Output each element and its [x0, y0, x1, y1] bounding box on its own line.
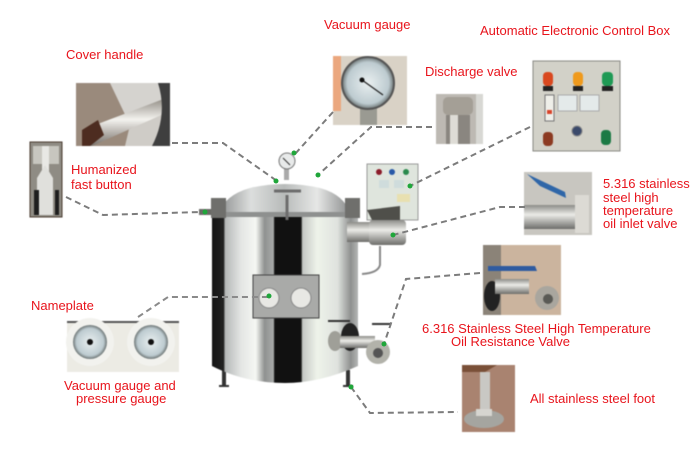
lid	[218, 184, 350, 214]
tank feet	[219, 370, 353, 387]
title: Vacuum gauge: Vacuum gauge	[324, 17, 410, 32]
label: 6.316 Stainless Steel High Temperature Oil Resistance Valve: 6.316 Stainless Steel High Temperature	[422, 321, 651, 336]
photo: oil inlet valve	[524, 172, 592, 235]
label: All stainless steel foot: All stainless steel foot	[530, 391, 655, 406]
label: 5.316 stainless steel high temperature oil inlet valve: steel high	[603, 190, 659, 205]
photo: humanized fast button	[30, 142, 62, 217]
title: Cover handle: Cover handle	[66, 47, 143, 62]
photo: stainless steel foot	[462, 365, 515, 432]
label: 5.316 stainless steel high temperature oil inlet valve: 5.316 stainless	[603, 176, 690, 191]
label: Humanized fast button: fast button	[71, 177, 132, 192]
label: Humanized fast button: Humanized	[71, 162, 137, 177]
title: Automatic Electronic Control Box: Automatic Electronic Control Box	[480, 23, 671, 38]
leader lines	[66, 112, 530, 413]
photo: automatic electronic control box	[533, 61, 620, 151]
side button	[199, 209, 211, 215]
label: 5.316 stainless steel high temperature oil inlet valve: temperature	[603, 203, 673, 218]
label: 6.316 Stainless Steel High Temperature Oil Resistance Valve: Oil Resistance Valve	[451, 334, 570, 349]
top gauge	[279, 153, 295, 180]
lid clamps	[211, 198, 360, 218]
gauge panel	[253, 275, 319, 318]
machine: vacuum fryer	[199, 153, 418, 387]
photo: cover handle	[76, 83, 170, 146]
photo: stainless steel valve	[483, 245, 561, 315]
bottom valve	[328, 321, 391, 364]
label: Vacuum gauge and pressure gauge: Vacuum gauge and	[64, 378, 176, 393]
green marker dots	[202, 150, 412, 390]
label: Vacuum gauge and pressure gauge: pressure gauge	[76, 391, 166, 406]
photo: vacuum gauge	[333, 56, 407, 125]
title: Discharge valve: Discharge valve	[425, 64, 518, 79]
photo: discharge valve	[436, 94, 483, 144]
tank body	[212, 216, 358, 383]
photo: nameplate gauges	[66, 318, 179, 372]
lid handle	[274, 191, 301, 220]
lid rim	[214, 212, 354, 217]
control box	[367, 164, 418, 220]
motor and pipe	[347, 220, 406, 274]
label: Nameplate: Nameplate	[31, 298, 94, 313]
label: 5.316 stainless steel high temperature oil inlet valve: oil inlet valve	[603, 216, 677, 231]
